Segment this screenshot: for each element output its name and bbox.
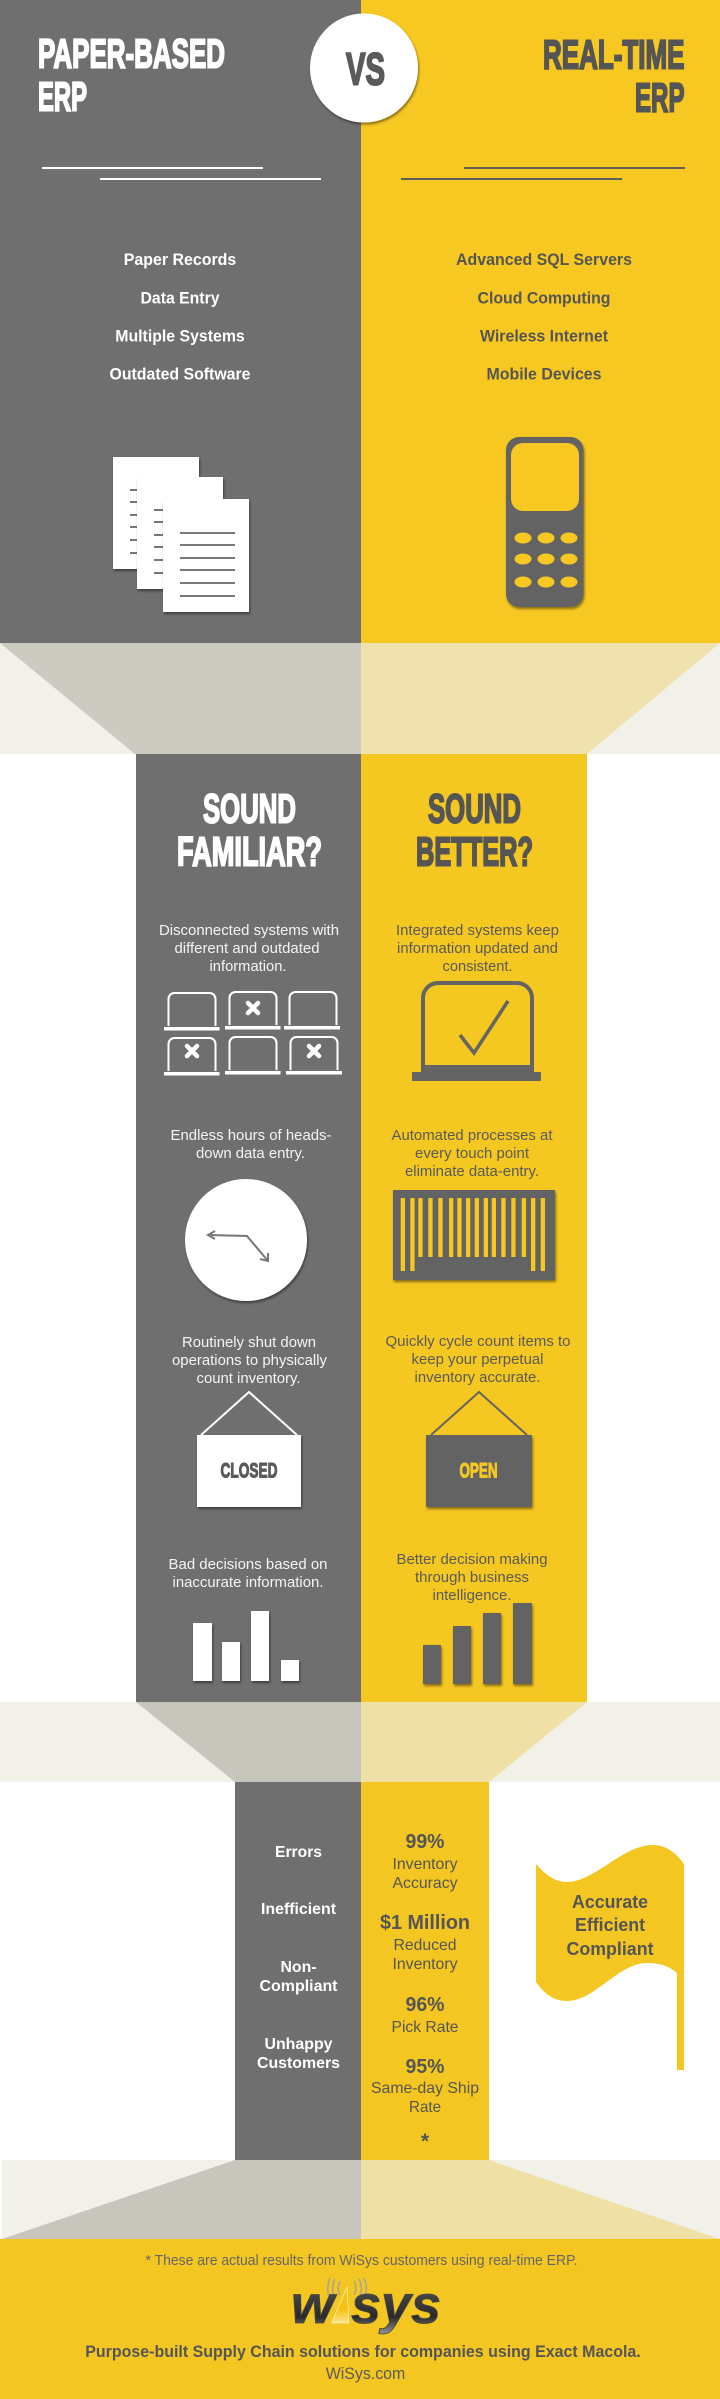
stat: inventory accuracy: Inventory [392, 1856, 458, 1873]
text: bad decisions: Bad decisions based on [168, 1556, 328, 1573]
stat: same-day ship rate: 95% [406, 2056, 445, 2078]
funnel: middle to results [0, 1702, 720, 1782]
panel: sound better column [361, 754, 587, 1702]
list: paper-based features: Data Entry [140, 290, 220, 308]
list: problems: Inefficient [261, 1901, 337, 1918]
panel: paper-based background [0, 0, 361, 643]
panel: sound familiar column [136, 754, 361, 1702]
text: routinely shut down: Routinely shut down [182, 1334, 316, 1351]
text: quickly cycle count: inventory accurate. [414, 1369, 540, 1386]
text: disconnected systems: different and outdated [174, 940, 320, 957]
heading: real-time ERP: ERP [635, 74, 684, 120]
tagline: Purpose-built Supply Chain solutions for companies using Exact Macola. [85, 2342, 641, 2361]
list: real-time features: Wireless Internet [480, 328, 608, 346]
heading: paper-based ERP: PAPER-BASED [38, 30, 225, 76]
text: endless hours: down data entry. [196, 1145, 305, 1162]
flag callout [536, 1845, 684, 2070]
list: problems: Unhappy [264, 2036, 333, 2053]
panel: real-time background [361, 0, 720, 643]
flag callout: Efficient [575, 1915, 645, 1935]
list: real-time features: Advanced SQL Servers [456, 251, 632, 269]
heading: real-time ERP [543, 32, 684, 120]
panel: footer [0, 2239, 720, 2399]
funnel: top to middle [0, 643, 720, 754]
logo: WiSys: w [291, 2275, 337, 2335]
text: better decision making [396, 1551, 548, 1604]
footnote asterisk: * [421, 2130, 430, 2153]
list: real-time features: Mobile Devices [486, 366, 602, 384]
stat: inventory accuracy: 99% [406, 1831, 445, 1853]
heading: sound better [416, 786, 533, 874]
panel: top comparison [0, 0, 720, 643]
icon: grid of laptops with errors [164, 992, 342, 1076]
heading: sound familiar: SOUND [203, 786, 296, 832]
heading: paper-based ERP: ERP [38, 74, 87, 120]
list: problems [257, 1844, 340, 2072]
list: problems: Compliant [260, 1978, 338, 1995]
chart: erratic bars [193, 1611, 299, 1681]
text: quickly cycle count: keep your perpetual [412, 1351, 544, 1368]
heading: sound familiar [177, 786, 322, 874]
VS badge [310, 14, 418, 122]
icon: mobile phone [506, 437, 584, 607]
icon: closed sign: CLOSED [220, 1458, 278, 1482]
list: problems: Errors [275, 1844, 322, 1861]
footnote text: * These are actual results from WiSys customers using real-time ERP. [146, 2253, 578, 2269]
text: routinely shut down [172, 1334, 327, 1387]
list: paper-based features: Outdated Software [110, 366, 250, 384]
text: disconnected systems [159, 922, 339, 975]
logo: WiSys: sys [351, 2275, 441, 2335]
stat: pick rate: 96% [406, 1994, 445, 2016]
list: problems: Non- [280, 1959, 316, 1976]
stat: pick rate: Pick Rate [392, 2019, 459, 2036]
icon: clock [185, 1179, 307, 1301]
text: routinely shut down: operations to physically [172, 1352, 327, 1369]
text: better decision making: through business [415, 1569, 529, 1586]
text: integrated systems: information updated and [397, 940, 558, 957]
chart: rising bars [423, 1603, 532, 1684]
text: bad decisions [168, 1556, 328, 1591]
funnel: results to footer [2, 2160, 720, 2239]
stat: reduced inventory [380, 1912, 470, 1973]
panel: problems column [235, 1782, 361, 2160]
heading: sound better: SOUND [428, 786, 521, 832]
flag callout: Compliant [566, 1939, 654, 1959]
divider lines: right [401, 167, 685, 180]
icon: open sign [426, 1392, 532, 1507]
website: WiSys.com [326, 2365, 405, 2383]
divider lines: left [42, 167, 321, 180]
list: problems: Customers [257, 2055, 340, 2072]
text: endless hours: Endless hours of heads- [170, 1127, 332, 1144]
text: disconnected systems: information. [210, 958, 286, 975]
list: real-time features [456, 251, 632, 384]
text: better decision making: Better decision making [396, 1551, 548, 1568]
list: paper-based features: Paper Records [124, 251, 236, 269]
flag callout: Accurate [572, 1892, 648, 1912]
text: endless hours [170, 1127, 332, 1162]
text: automated processes: Automated processes at [392, 1127, 553, 1144]
stat: reduced inventory: $1 Million [380, 1912, 470, 1934]
heading: sound familiar: FAMILIAR? [177, 828, 322, 874]
logo: WiSys [291, 2275, 441, 2335]
text: disconnected systems: Disconnected systems with [159, 922, 339, 939]
text: automated processes [392, 1127, 553, 1180]
text: quickly cycle count: Quickly cycle count items to [386, 1333, 570, 1350]
stat: reduced inventory: Reduced [394, 1937, 456, 1954]
stat: same-day ship rate: Rate [409, 2099, 441, 2116]
list: real-time features: Cloud Computing [478, 290, 610, 308]
stat: pick rate [392, 1994, 459, 2036]
text: integrated systems: Integrated systems keep [396, 922, 559, 939]
icon: laptop with check mark [412, 983, 541, 1081]
stat: reduced inventory: Inventory [392, 1956, 458, 1973]
list: paper-based features: Multiple Systems [115, 328, 245, 346]
stat: inventory accuracy: Accuracy [392, 1875, 458, 1892]
stat: same-day ship rate [371, 2056, 479, 2116]
list: paper-based features [110, 251, 250, 384]
text: integrated systems: consistent. [442, 958, 512, 975]
text: quickly cycle count [386, 1333, 570, 1386]
text: automated processes: every touch point [415, 1145, 530, 1162]
icon: open sign: OPEN [460, 1458, 498, 1482]
stat: same-day ship rate: Same-day Ship [371, 2080, 479, 2097]
heading: paper-based ERP [38, 30, 225, 120]
panel: results column [361, 1782, 489, 2160]
text: automated processes: eliminate data-entry. [405, 1163, 539, 1180]
text: routinely shut down: count inventory. [196, 1370, 300, 1387]
text: bad decisions: inaccurate information. [172, 1574, 324, 1591]
text: integrated systems [396, 922, 559, 975]
icon: barcode [393, 1190, 555, 1280]
icon: closed sign [197, 1392, 301, 1507]
icon: stack of papers [113, 457, 249, 612]
heading: sound better: BETTER? [416, 828, 533, 874]
stat: inventory accuracy [392, 1831, 458, 1892]
text: better decision making: intelligence. [432, 1587, 512, 1604]
VS badge: VS [346, 44, 385, 94]
